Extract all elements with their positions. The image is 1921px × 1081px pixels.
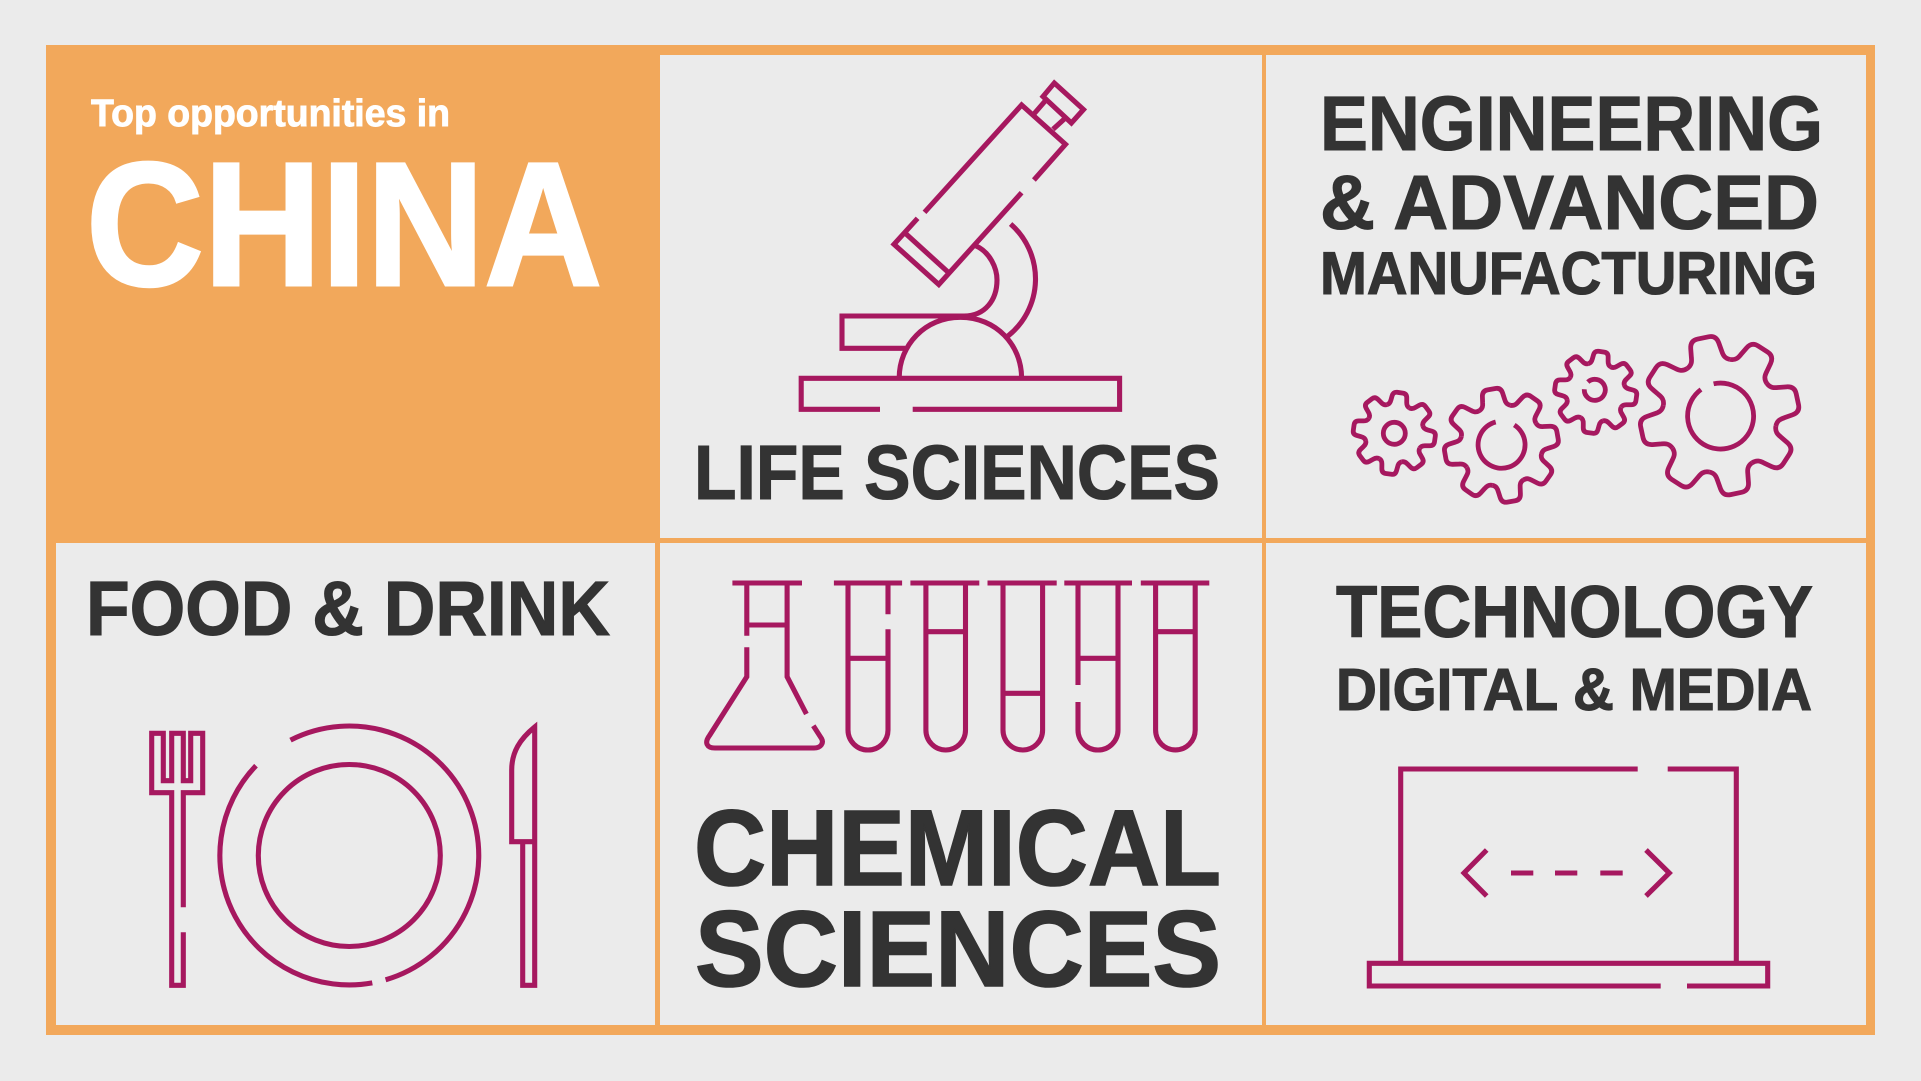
- heading: life sciences: LIFE SCIENCES: [694, 430, 1220, 516]
- heading: engineering and advanced manufacturing: MANUFACTURING: [1320, 240, 1817, 307]
- heading: engineering and advanced manufacturing: & ADVANCED: [1320, 160, 1819, 246]
- heading: food and drink: FOOD & DRINK: [86, 566, 610, 652]
- title: China: CHINA: [86, 127, 602, 323]
- panel: technology, digital and media: [1266, 543, 1866, 1025]
- heading: engineering and advanced manufacturing: ENGINEERING: [1320, 81, 1823, 167]
- panel: life sciences: [660, 55, 1262, 538]
- heading: chemical sciences: [694, 787, 1221, 1009]
- icon: fork: [152, 733, 203, 985]
- heading: chemical sciences: SCIENCES: [695, 888, 1221, 1009]
- icon: plate: [220, 726, 479, 985]
- icon: microscope: [801, 83, 1120, 409]
- heading: chemical sciences: CHEMICAL: [694, 787, 1221, 908]
- panel: engineering and advanced manufacturing: [1266, 55, 1866, 538]
- subtitle: Top opportunities in: [91, 93, 450, 135]
- icon: knife: [512, 727, 535, 985]
- icon: gears: [1348, 321, 1814, 511]
- panel: food and drink: [56, 543, 655, 1025]
- heading: engineering and advanced manufacturing: [1320, 81, 1823, 307]
- icon: laptop with code: [1369, 769, 1768, 986]
- heading: technology, digital and media: [1336, 572, 1813, 723]
- icon: test tubes: [834, 583, 1209, 750]
- heading: technology, digital and media: TECHNOLOGY: [1336, 572, 1813, 653]
- heading: technology, digital and media: DIGITAL & MEDIA: [1336, 657, 1812, 723]
- panel: title: [86, 93, 602, 323]
- panel: chemical sciences: [660, 543, 1262, 1025]
- icon: flask: [707, 583, 822, 748]
